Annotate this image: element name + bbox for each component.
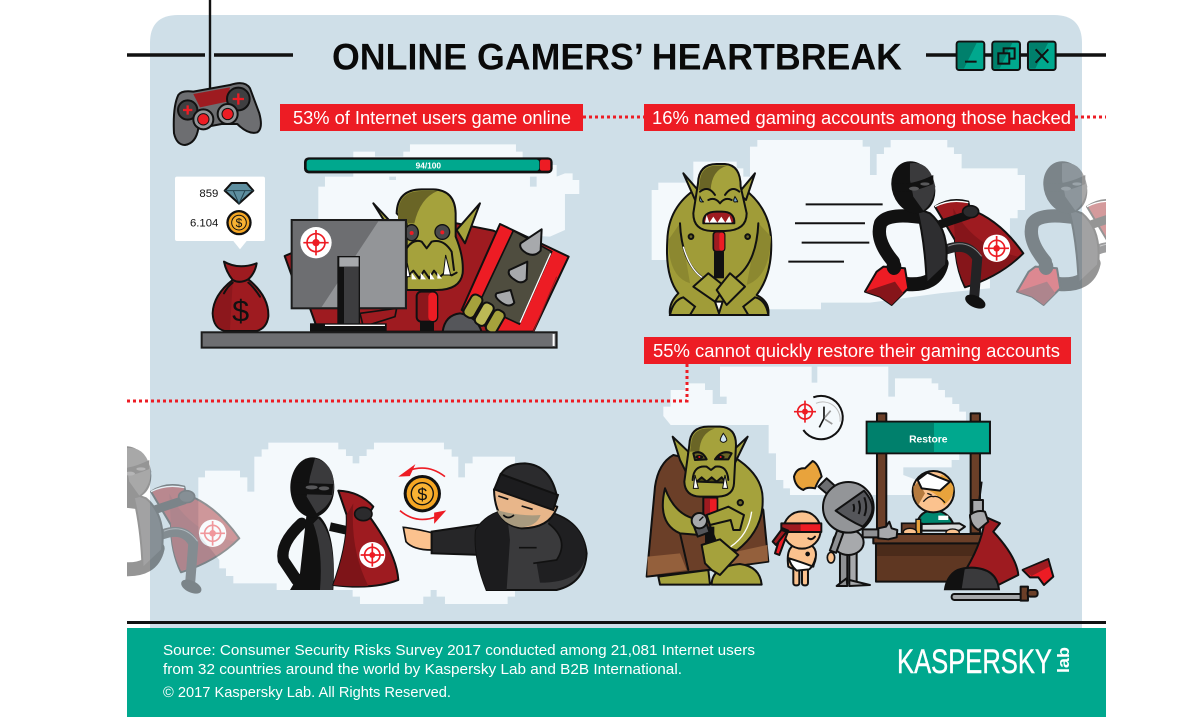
blindfolded boy <box>773 511 821 585</box>
armor piece <box>1023 559 1053 585</box>
exchange arrows <box>400 467 445 522</box>
label: 16% gaming accounts hacked: 16% named gaming accounts among those hacked <box>652 108 1071 128</box>
icon: coin: $ <box>236 216 243 230</box>
right arm and gauntlet <box>863 522 897 539</box>
icon: diamond <box>225 183 253 204</box>
icon: game controller on cord <box>174 0 261 145</box>
health bar <box>304 157 553 173</box>
header rule right <box>926 53 1106 57</box>
gauntlet <box>970 482 988 530</box>
window buttons <box>957 42 1056 70</box>
title: ONLINE GAMERS’ HEARTBREAK <box>332 36 902 78</box>
clock and target icon <box>794 396 843 439</box>
header rule left <box>127 53 293 57</box>
mouth <box>693 466 728 488</box>
pixel cloud behind trade scene <box>198 443 515 604</box>
legs <box>837 552 870 586</box>
posts <box>877 413 980 533</box>
label: 55% cannot restore: 55% cannot quickly restore their gaming accounts <box>653 341 1060 361</box>
helmet <box>945 568 999 589</box>
headband <box>773 523 821 555</box>
diaper <box>789 558 815 571</box>
health bar: 94/100 <box>416 160 441 170</box>
source text: © 2017 Kaspersky Lab. All Rights Reserved. <box>163 685 451 701</box>
sword on floor <box>952 587 1038 601</box>
stolen armor piece <box>865 258 908 305</box>
footer band <box>127 628 1106 717</box>
head <box>684 427 736 497</box>
sword on counter <box>902 519 965 536</box>
coin: $ <box>417 484 427 504</box>
source text: Source: Consumer Security Risks Survey 2017 conducted among 21,081 Internet users <box>163 643 755 659</box>
coin <box>404 475 441 512</box>
gamer orc at desk <box>285 189 569 335</box>
thief arm <box>283 523 302 580</box>
pixel cloud behind thief scene <box>652 140 1025 309</box>
cloak <box>647 455 768 577</box>
plume <box>794 461 822 490</box>
orc ears <box>373 203 480 243</box>
left arm <box>827 530 843 563</box>
faded thief copy right <box>1016 161 1106 306</box>
monitor <box>292 220 406 308</box>
crying orc <box>667 164 771 315</box>
watch <box>692 513 710 537</box>
orc arm behind <box>360 308 397 327</box>
label: 53% game online: 53% of Internet users game online <box>293 108 571 128</box>
orc tie <box>417 292 437 332</box>
target sticker <box>300 227 332 258</box>
restore stall <box>867 413 990 582</box>
helmet <box>823 482 874 533</box>
body <box>833 530 864 555</box>
red sack <box>333 491 398 587</box>
desk <box>202 332 557 348</box>
pixel cloud behind restore scene <box>663 367 973 495</box>
red dotted connectors <box>127 117 1106 401</box>
thief hands and foot <box>963 206 986 310</box>
panel: light blue background <box>150 15 1082 622</box>
monitor stand <box>310 256 387 332</box>
orc body <box>285 223 533 332</box>
ears <box>673 437 748 473</box>
worried orc <box>647 427 768 585</box>
faded thief copy left <box>127 446 240 594</box>
orc mouth and fangs <box>406 241 457 279</box>
label: 55% cannot restore <box>644 337 1071 364</box>
restore sign <box>867 422 990 453</box>
source text <box>163 643 755 701</box>
thief head <box>290 457 334 517</box>
brow and eyes <box>693 452 732 460</box>
buyer arm and hand <box>403 524 483 555</box>
chest and right arm <box>707 457 763 551</box>
stolen bag <box>935 200 1023 287</box>
head <box>783 511 821 549</box>
buyer head <box>494 463 558 528</box>
logo: Kaspersky Lab: KASPERSKY <box>897 643 1052 681</box>
thief body <box>290 513 334 590</box>
source text: from 32 countries around the world by Kaspersky Lab and B2B International. <box>163 662 682 678</box>
logo: Kaspersky Lab: lab <box>1054 647 1073 673</box>
feet <box>658 564 762 585</box>
helmet crest base <box>818 478 837 495</box>
orc hand on shield <box>443 293 506 335</box>
thief limbs <box>879 215 981 296</box>
icon: money bag: $ <box>232 295 249 329</box>
visor <box>836 491 872 527</box>
icon: money bag <box>213 262 268 331</box>
legs <box>793 563 808 585</box>
left arm <box>663 488 705 535</box>
torso <box>788 543 816 568</box>
orc eyes <box>405 225 450 241</box>
thief torso <box>917 208 947 283</box>
spiked shield <box>462 224 569 332</box>
coin count: 6.104 <box>190 217 218 229</box>
arms crossed <box>702 507 744 575</box>
orc head <box>397 189 463 290</box>
thief head <box>884 155 942 220</box>
dropped loot <box>945 482 1053 601</box>
pixel cloud behind desk scene <box>318 144 579 237</box>
counter <box>873 534 982 582</box>
thief with bag <box>283 457 587 590</box>
resource bubble <box>175 177 265 249</box>
running thief <box>865 155 1023 310</box>
restore sign: Restore <box>909 434 948 445</box>
sweat drop <box>720 433 727 442</box>
label: 53% game online <box>280 104 583 131</box>
red sack <box>967 517 1018 585</box>
footer black rule <box>127 621 1106 624</box>
knight <box>794 461 897 586</box>
speed lines <box>788 204 883 262</box>
footer light strip <box>150 624 1082 628</box>
gem count: 859 <box>199 188 218 200</box>
buyer body <box>476 510 587 590</box>
merchant <box>913 471 955 530</box>
tie <box>703 497 717 543</box>
